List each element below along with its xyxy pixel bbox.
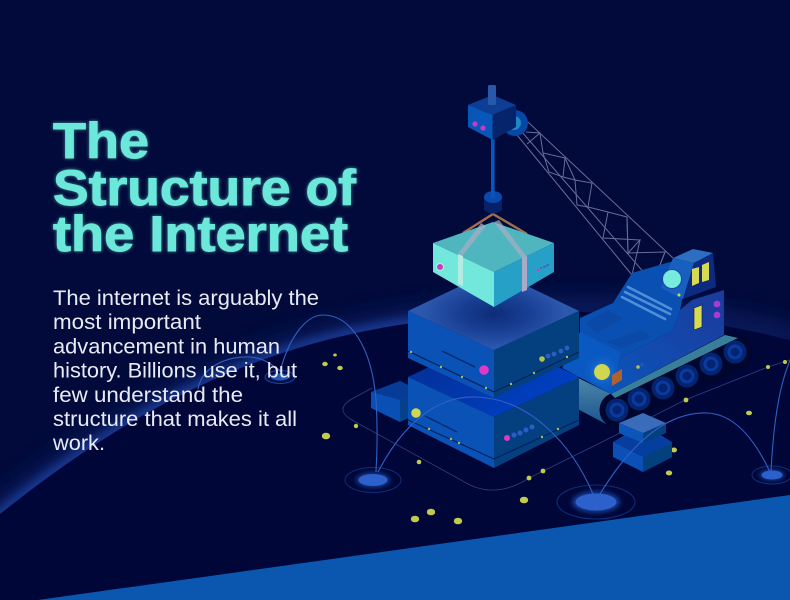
crane top deck bbox=[580, 262, 690, 358]
server: upper bbox=[408, 270, 579, 398]
network pad: far left bbox=[265, 370, 295, 384]
bottom blue band bbox=[38, 495, 790, 600]
crane lower hull bbox=[570, 374, 611, 424]
intro paragraph: structure that makes it all bbox=[53, 408, 297, 431]
server: lower bbox=[408, 336, 579, 468]
network pad: left bbox=[345, 468, 401, 492]
circuit lines bbox=[343, 360, 790, 490]
crane wheels bbox=[606, 340, 746, 422]
lower server groove bbox=[408, 420, 579, 459]
crane body side bbox=[611, 290, 724, 394]
network pad: right bbox=[752, 466, 790, 484]
crane orange plate bbox=[612, 369, 622, 386]
cab windows bbox=[692, 267, 699, 286]
intro paragraph: work. bbox=[52, 432, 105, 455]
box straps bbox=[458, 220, 527, 292]
intro paragraph: advancement in human bbox=[53, 336, 280, 358]
crane door window bbox=[694, 305, 702, 330]
crane front face bbox=[562, 332, 620, 394]
crane purple lights bbox=[714, 301, 720, 318]
crane headlight bbox=[582, 352, 622, 392]
network arcs bbox=[198, 315, 790, 494]
title bbox=[53, 113, 356, 262]
crane track bbox=[611, 335, 738, 410]
intro paragraph: The internet is arguably the bbox=[53, 287, 319, 310]
upper server groove bbox=[408, 351, 579, 392]
crane cab bbox=[661, 249, 716, 299]
intro paragraph: history. Billions use it, but bbox=[53, 360, 297, 382]
intro paragraph bbox=[52, 287, 319, 455]
title: The bbox=[53, 113, 149, 169]
crane hook assembly bbox=[484, 138, 502, 214]
intro paragraph: few understand the bbox=[53, 384, 243, 407]
planet ground bbox=[0, 312, 790, 600]
cab porthole bbox=[662, 270, 682, 288]
network pad: centre bbox=[557, 485, 635, 519]
crane pulley head bbox=[468, 85, 528, 140]
intro paragraph: most important bbox=[53, 311, 201, 334]
lower server LEDs bbox=[411, 408, 559, 444]
small stacked boxes bbox=[613, 413, 672, 472]
side box bbox=[371, 381, 408, 422]
box LEDs bbox=[436, 264, 444, 270]
title: the Internet bbox=[53, 206, 348, 262]
lifting ropes bbox=[463, 214, 527, 234]
upper server LEDs bbox=[410, 346, 569, 389]
title: Structure of bbox=[53, 160, 356, 216]
yellow dots bbox=[322, 354, 787, 524]
crane hood stripes bbox=[622, 287, 671, 319]
suspended teal box bbox=[433, 220, 554, 307]
crane bbox=[517, 122, 746, 424]
crane boom bbox=[517, 122, 673, 283]
horizon glow bbox=[0, 312, 790, 522]
